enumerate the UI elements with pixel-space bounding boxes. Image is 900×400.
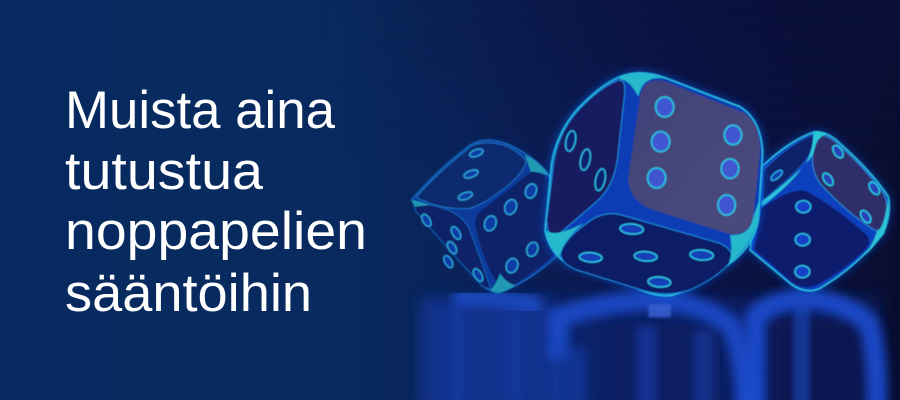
- centre die grey face: [628, 80, 760, 234]
- die: left: [412, 140, 557, 293]
- centre die glow: [545, 73, 763, 296]
- right die teal highlights: [762, 132, 888, 255]
- left die front face: [414, 205, 491, 289]
- right die back face: [763, 135, 814, 201]
- heading: noppapelien: [65, 202, 367, 261]
- right die pips: [769, 144, 882, 278]
- die: centre: [545, 73, 763, 296]
- centre die grey-face pips: [648, 97, 742, 215]
- centre die teal corners: [546, 73, 759, 264]
- dark top-right shading: [465, 0, 706, 41]
- right die front face: [754, 190, 869, 287]
- reflections on the table: [420, 297, 880, 400]
- right die glow: [750, 132, 889, 291]
- centre die left face: [547, 80, 625, 235]
- right die body: [750, 132, 889, 291]
- left die body: [412, 140, 557, 293]
- right die top-right face: [813, 135, 887, 230]
- heading: [65, 81, 367, 323]
- heading: sääntöihin: [65, 264, 312, 323]
- left die pips: [420, 147, 540, 283]
- centre die left-face pips: [564, 130, 607, 191]
- heading: Muista aina: [65, 81, 336, 140]
- left die top face: [417, 143, 526, 209]
- centre die bottom-face pips: [579, 223, 714, 288]
- left die glow: [412, 140, 557, 293]
- centre die bottom face: [561, 214, 732, 294]
- dice illustration, in 3x coordinates: [412, 73, 889, 400]
- heading: tutustua: [65, 142, 264, 201]
- die: right: [750, 132, 889, 291]
- centre die body: [545, 73, 763, 296]
- left die teal corners: [412, 155, 551, 293]
- left die right face: [475, 172, 554, 289]
